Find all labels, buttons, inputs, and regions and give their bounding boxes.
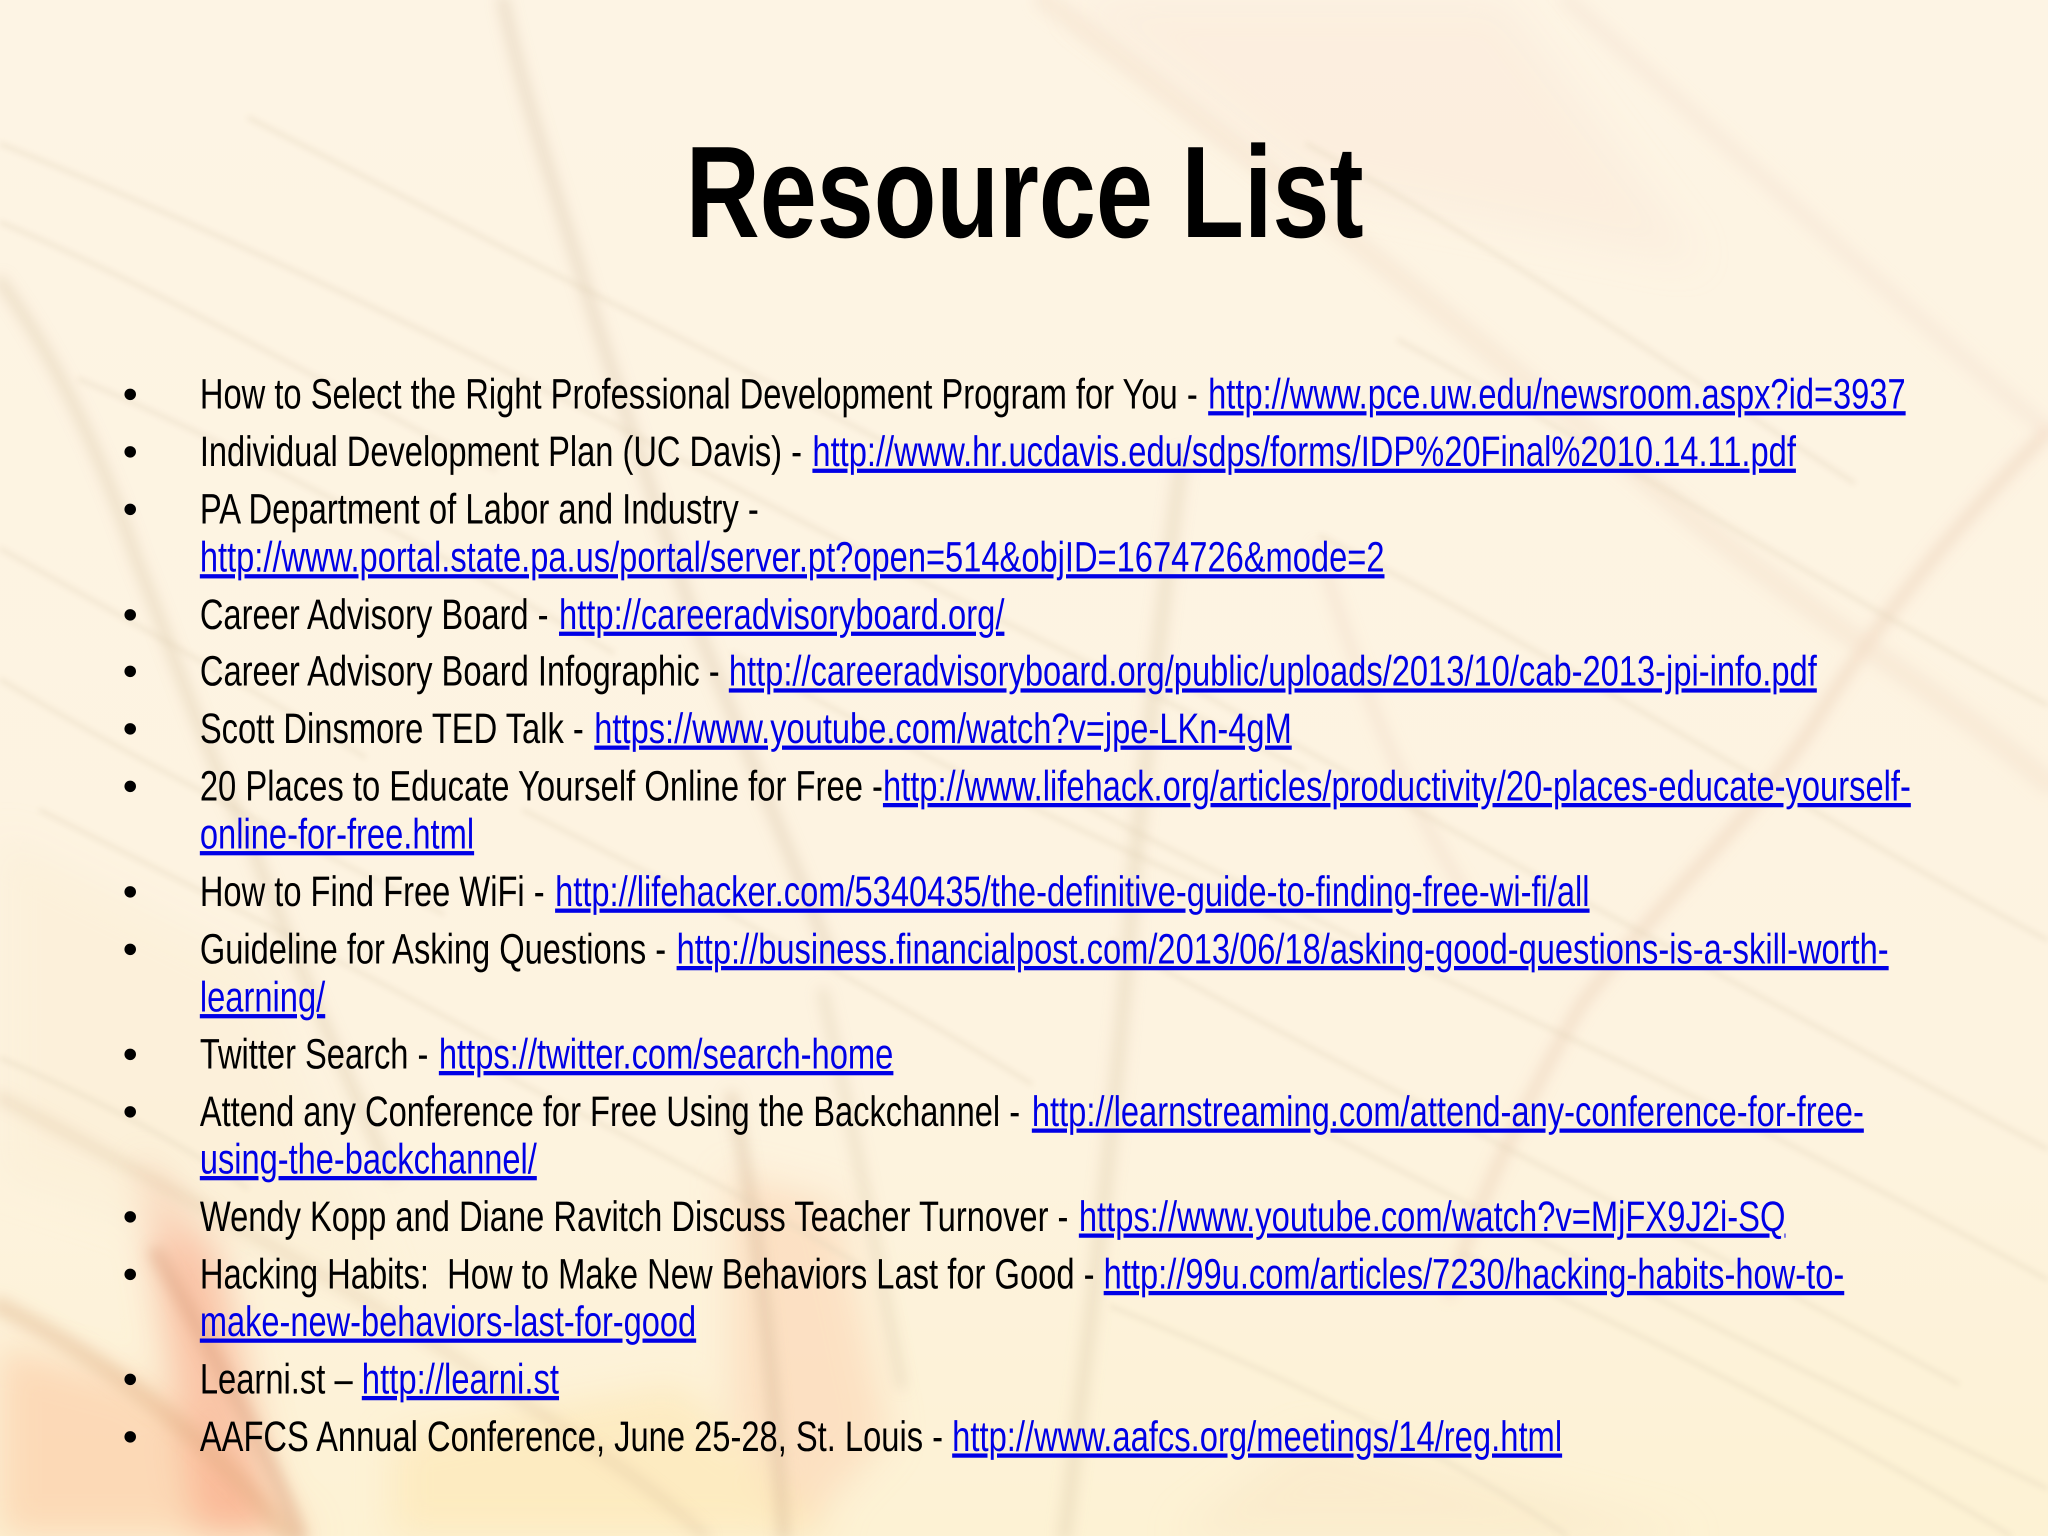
item: career advisory board: Career Advisory Board -: [200, 590, 549, 638]
item: free wifi: [123, 867, 1590, 915]
item: 20 places to educate yourself: •: [123, 761, 138, 810]
item: career advisory board infographic: •: [123, 647, 138, 695]
item: free wifi: How to Find Free WiFi -: [200, 867, 545, 915]
item: twitter search: •: [123, 1029, 138, 1078]
item: Scott Dinsmore TED talk: •: [123, 704, 138, 752]
item: backchannel: Attend any Conference for Free Using the Backchannel -: [200, 1087, 1020, 1135]
item: hacking habits: Hacking Habits: How to Make New Behaviors Last for Good -: [200, 1249, 1095, 1298]
item: learnist: http://learni.st: [362, 1354, 559, 1403]
item: free wifi: •: [123, 867, 138, 915]
item: twitter search: https://twitter.com/search-home: [439, 1029, 893, 1078]
item: individual development plan: [123, 427, 1797, 475]
item: AAFCS conference: [123, 1412, 1562, 1460]
item: career advisory board: •: [123, 590, 138, 638]
item: asking questions: •: [123, 924, 138, 973]
item: Scott Dinsmore TED talk: [123, 704, 1292, 752]
item: teacher turnover: [123, 1192, 1785, 1240]
item: hacking habits: [123, 1249, 1844, 1345]
item: Scott Dinsmore TED talk: https://www.youtube.com/watch?v=jpe-LKn-4gM: [594, 704, 1292, 752]
item: 20 places to educate yourself: 20 Places to Educate Yourself Online for Free -: [200, 761, 883, 810]
item: backchannel: using-the-backchannel/: [200, 1134, 538, 1183]
item: PA department of labor: http://www.portal.state.pa.us/portal/server.pt?open=514&objID=1674726&mode=2: [200, 532, 1384, 581]
item: asking questions: [123, 924, 1889, 1021]
item: twitter search: Twitter Search -: [200, 1029, 428, 1078]
item: learnist: [123, 1354, 559, 1403]
item: career advisory board infographic: [123, 647, 1818, 695]
item: individual development plan: Individual Development Plan (UC Davis) -: [200, 427, 802, 475]
item: learnist: Learni.st –: [200, 1354, 353, 1403]
item: AAFCS conference: http://www.aafcs.org/meetings/14/reg.html: [952, 1412, 1562, 1460]
item: career advisory board: http://careeradvisoryboard.org/: [559, 590, 1005, 638]
item: backchannel: [123, 1087, 1864, 1183]
item: hacking habits: •: [123, 1249, 138, 1298]
item: AAFCS conference: AAFCS Annual Conference, June 25-28, St. Louis -: [200, 1412, 943, 1460]
item: professional development program: •: [123, 369, 138, 418]
item: teacher turnover: Wendy Kopp and Diane Ravitch Discuss Teacher Turnover -: [200, 1192, 1068, 1240]
item: learnist: •: [123, 1354, 138, 1403]
item: hacking habits: http://99u.com/articles/7230/hacking-habits-how-to-: [1104, 1249, 1844, 1298]
title: Resource List: [686, 120, 1364, 266]
item: asking questions: Guideline for Asking Questions -: [200, 924, 666, 973]
item: asking questions: learning/: [200, 972, 326, 1021]
item: AAFCS conference: •: [123, 1412, 138, 1460]
item: career advisory board infographic: Career Advisory Board Infographic -: [200, 647, 720, 695]
item: 20 places to educate yourself: [123, 761, 1911, 858]
item: 20 places to educate yourself: online-for-free.html: [200, 809, 474, 858]
item: PA department of labor: [123, 484, 1384, 581]
item: PA department of labor: •: [123, 484, 138, 533]
item: backchannel: •: [123, 1087, 138, 1135]
resource list: [123, 369, 1911, 1460]
item: individual development plan: •: [123, 427, 138, 475]
item: career advisory board: [123, 590, 1005, 638]
item: teacher turnover: https://www.youtube.com/watch?v=MjFX9J2i-SQ: [1079, 1192, 1785, 1240]
item: PA department of labor: PA Department of Labor and Industry -: [200, 484, 759, 533]
item: teacher turnover: •: [123, 1192, 138, 1240]
item: professional development program: How to Select the Right Professional Development Program for You -: [200, 369, 1198, 418]
item: twitter search: [123, 1029, 893, 1078]
item: Scott Dinsmore TED talk: Scott Dinsmore TED Talk -: [200, 704, 584, 752]
item: hacking habits: make-new-behaviors-last-for-good: [200, 1297, 696, 1345]
item: free wifi: http://lifehacker.com/5340435/the-definitive-guide-to-finding-free-wi-fi/all: [555, 867, 1590, 915]
